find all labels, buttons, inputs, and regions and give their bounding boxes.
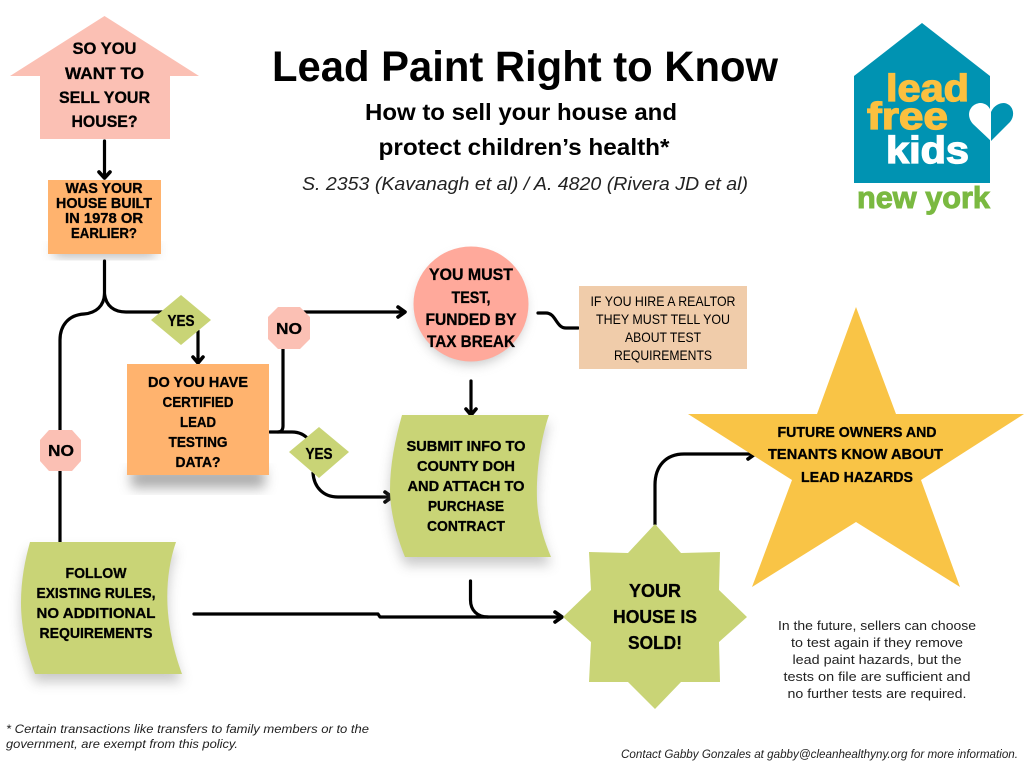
existing rules panel bbox=[21, 542, 182, 682]
future sellers note: In the future, sellers can choose bbox=[778, 618, 976, 633]
footnote: government, are exempt from this policy. bbox=[6, 737, 238, 751]
question: house built in 1978 or earlier: IN 1978 OR bbox=[65, 210, 143, 227]
submit info panel: CONTRACT bbox=[427, 519, 505, 535]
connector lines and arrows bbox=[60, 141, 755, 622]
circle: you must test: YOU MUST bbox=[429, 266, 513, 284]
star: future owners bbox=[688, 307, 1024, 587]
starburst: your house is sold: YOUR bbox=[629, 581, 681, 601]
circle: you must test: TEST, bbox=[452, 289, 490, 307]
yes diamond 2 bbox=[289, 427, 349, 478]
future sellers note: no further tests are required. bbox=[788, 686, 966, 701]
question: certified lead testing data: LEAD bbox=[180, 414, 216, 431]
question: certified lead testing data bbox=[127, 364, 269, 488]
no octagon left bbox=[40, 430, 81, 471]
footnote bbox=[6, 722, 369, 751]
future sellers note: lead paint hazards, but the bbox=[792, 652, 962, 667]
yes diamond 1 bbox=[151, 295, 211, 345]
logo: lead free kids new york: free bbox=[867, 96, 948, 138]
existing rules panel: NO ADDITIONAL bbox=[36, 606, 156, 622]
logo: lead free kids new york bbox=[854, 23, 1013, 215]
submit info panel: COUNTY DOH bbox=[417, 459, 515, 475]
yes diamond 1: YES bbox=[168, 313, 194, 330]
contact line: Contact Gabby Gonzales at gabby@cleanhealthyny.org for more information. bbox=[621, 749, 1018, 761]
circle: you must test: FUNDED BY bbox=[426, 311, 516, 329]
logo: lead free kids new york: lead bbox=[886, 68, 969, 110]
star: future owners: TENANTS KNOW ABOUT bbox=[768, 447, 943, 463]
logo: lead free kids new york: new york bbox=[857, 180, 991, 215]
question: house built in 1978 or earlier: WAS YOUR bbox=[66, 180, 143, 197]
question: house built in 1978 or earlier: HOUSE BUILT bbox=[56, 195, 152, 212]
starburst: your house is sold: HOUSE IS bbox=[613, 607, 697, 627]
star: future owners: LEAD HAZARDS bbox=[801, 470, 913, 486]
start arrow: so you want to sell: SO YOU bbox=[72, 39, 136, 58]
question: certified lead testing data: DATA? bbox=[176, 454, 220, 471]
submit info panel: SUBMIT INFO TO bbox=[406, 439, 526, 455]
start arrow: so you want to sell bbox=[10, 16, 199, 139]
logo: lead free kids new york: kids bbox=[886, 130, 969, 172]
circle: you must test bbox=[414, 246, 528, 364]
question: house built in 1978 or earlier bbox=[48, 180, 161, 256]
existing rules panel: REQUIREMENTS bbox=[40, 626, 153, 642]
realtor note bbox=[579, 286, 747, 369]
start arrow: so you want to sell: WANT TO bbox=[65, 64, 144, 83]
realtor note: ABOUT TEST bbox=[625, 329, 701, 345]
question: certified lead testing data: DO YOU HAVE bbox=[148, 374, 248, 391]
footnote: * Certain transactions like transfers to family members or to the bbox=[6, 722, 369, 736]
realtor note: REQUIREMENTS bbox=[614, 347, 712, 363]
start arrow: so you want to sell: SELL YOUR bbox=[59, 88, 150, 107]
submit info panel bbox=[390, 415, 551, 565]
subtitle: How to sell your house and bbox=[365, 99, 677, 125]
question: certified lead testing data: TESTING bbox=[168, 434, 228, 451]
no octagon top bbox=[268, 307, 310, 349]
title: Lead Paint Right to Know bbox=[272, 43, 779, 91]
future sellers note: tests on file are sufficient and bbox=[784, 669, 970, 684]
future sellers note bbox=[778, 618, 976, 701]
question: house built in 1978 or earlier: EARLIER? bbox=[71, 225, 137, 242]
bill numbers: S. 2353 (Kavanagh et al) / A. 4820 (Rivera JD et al) bbox=[302, 174, 748, 194]
star: future owners: FUTURE OWNERS AND bbox=[778, 425, 936, 441]
no octagon top: NO bbox=[276, 321, 302, 338]
submit info panel: PURCHASE bbox=[428, 499, 504, 515]
starburst: your house is sold: SOLD! bbox=[628, 633, 682, 653]
future sellers note: to test again if they remove bbox=[791, 635, 963, 650]
realtor note: THEY MUST TELL YOU bbox=[596, 311, 730, 327]
realtor note: IF YOU HIRE A REALTOR bbox=[590, 293, 736, 309]
submit info panel: AND ATTACH TO bbox=[408, 479, 524, 495]
yes diamond 2: YES bbox=[306, 446, 332, 463]
subtitle: protect children’s health* bbox=[378, 134, 670, 160]
existing rules panel: FOLLOW bbox=[66, 566, 127, 582]
no octagon left: NO bbox=[48, 443, 74, 460]
existing rules panel: EXISTING RULES, bbox=[36, 586, 156, 602]
question: certified lead testing data: CERTIFIED bbox=[162, 394, 234, 411]
start arrow: so you want to sell: HOUSE? bbox=[72, 112, 138, 131]
starburst: your house is sold bbox=[563, 524, 747, 709]
circle: you must test: TAX BREAK bbox=[427, 333, 515, 351]
subtitle bbox=[365, 99, 677, 160]
